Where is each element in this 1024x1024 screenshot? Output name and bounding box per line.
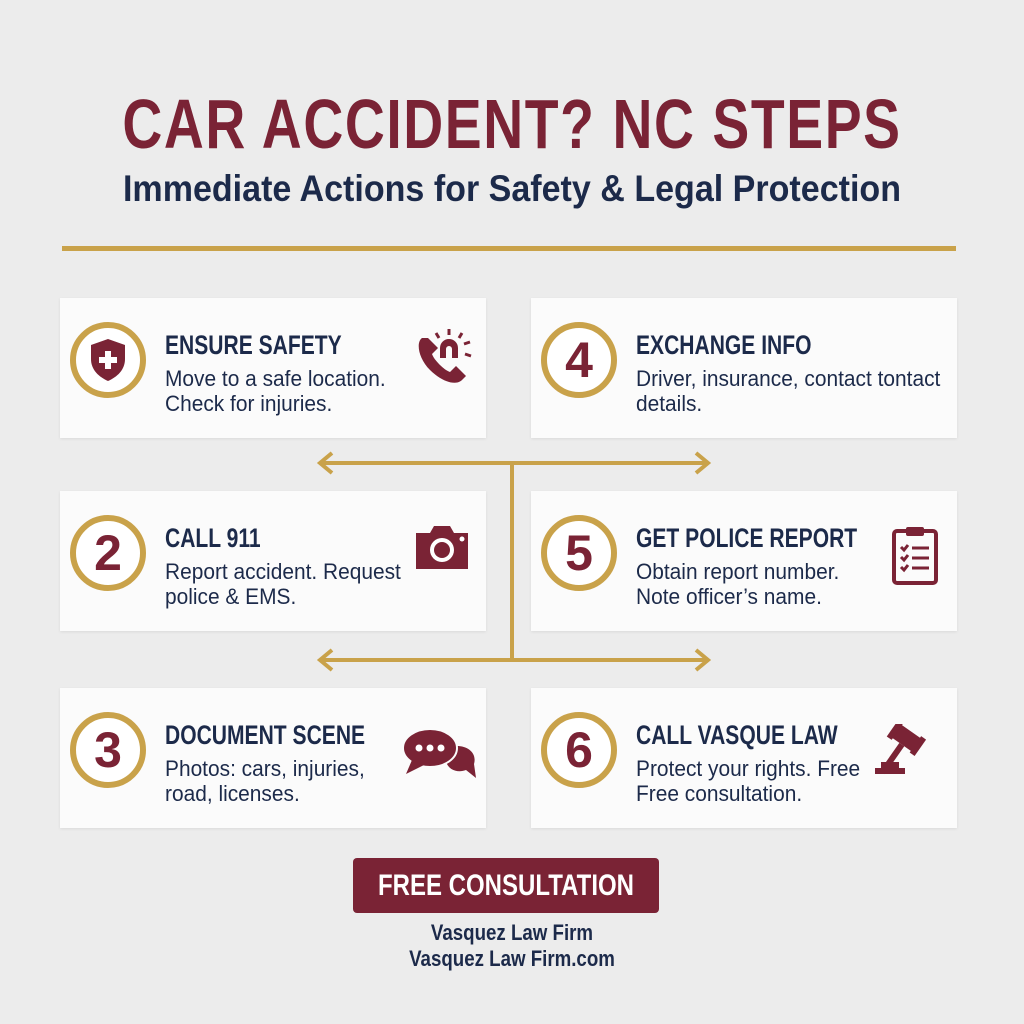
card 3: road, licenses. — [165, 781, 300, 806]
card 4: 4 — [565, 332, 593, 388]
card 1: Check for injuries. — [165, 391, 332, 416]
card 5: GET POLICE REPORT — [636, 523, 857, 553]
icon: clipboard — [892, 527, 938, 585]
card 3 — [60, 688, 486, 828]
card 4: details. — [636, 391, 702, 416]
card 3: DOCUMENT SCENE — [165, 720, 365, 750]
card 4: EXCHANGE INFO — [636, 330, 812, 360]
title: CAR ACCIDENT? NC STEPS — [122, 85, 902, 163]
card 1: Move to a safe location. — [165, 366, 386, 391]
card 1: ENSURE SAFETY — [165, 330, 342, 360]
card 2: CALL 911 — [165, 523, 261, 553]
card 2: Report accident. Request — [165, 559, 401, 584]
card 4 — [531, 298, 957, 438]
card 4: Driver, insurance, contact tontact — [636, 366, 940, 391]
icon: chat — [404, 730, 476, 778]
card 6: 6 — [565, 722, 593, 778]
card 3: 3 — [94, 722, 122, 778]
card 2: police & EMS. — [165, 584, 296, 609]
icon: camera — [416, 526, 468, 569]
icon: shield — [70, 322, 146, 398]
icon: phone — [418, 329, 472, 383]
card 6: Free consultation. — [636, 781, 802, 806]
card 1 — [60, 298, 486, 438]
card 6 — [531, 688, 957, 828]
card 5: Note officer’s name. — [636, 584, 822, 609]
card 3: Photos: cars, injuries, — [165, 756, 365, 781]
subtitle: Immediate Actions for Safety & Legal Protection — [123, 168, 901, 209]
footer text: Vasquez Law Firm.com — [409, 946, 615, 971]
icon: gavel — [875, 724, 926, 774]
footer text — [409, 920, 615, 971]
card 2: 2 — [94, 525, 122, 581]
card 6: Protect your rights. Free — [636, 756, 860, 781]
card 6: CALL VASQUE LAW — [636, 720, 838, 750]
card 5: 5 — [565, 525, 593, 581]
CTA button: FREE CONSULTATION — [378, 869, 634, 902]
CTA button — [353, 858, 659, 913]
card 2 — [60, 491, 486, 631]
card 5: Obtain report number. — [636, 559, 839, 584]
footer text: Vasquez Law Firm — [431, 920, 593, 945]
card 5 — [531, 491, 957, 631]
